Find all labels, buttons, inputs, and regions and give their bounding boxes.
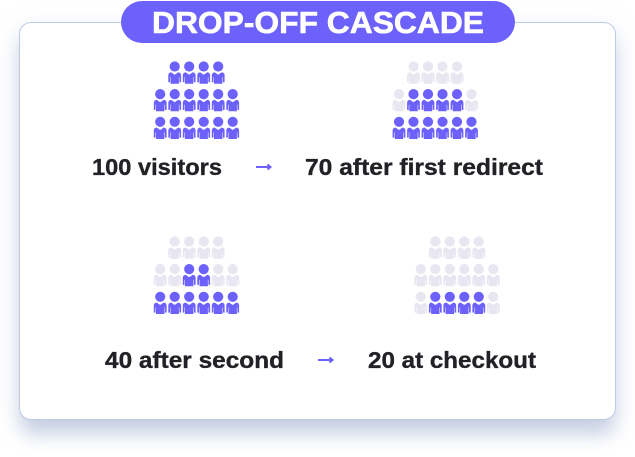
title pill (121, 1, 515, 43)
icon group: 40 after second (154, 236, 239, 314)
label: 40 after second: 40 after second (105, 347, 284, 373)
title pill: DROP-OFF CASCADE (152, 5, 484, 40)
label: 20 at checkout: 20 at checkout (368, 347, 536, 373)
icon group: 70 after first redirect (393, 61, 478, 139)
label: 100 visitors: 100 visitors (92, 154, 222, 180)
label: 70 after first redirect: 70 after first redirect (305, 154, 543, 180)
arrow: second step (318, 358, 332, 362)
icon group: 20 at checkout (414, 236, 500, 314)
icon group: 100 visitors (154, 61, 239, 139)
arrow: first step (256, 164, 270, 170)
